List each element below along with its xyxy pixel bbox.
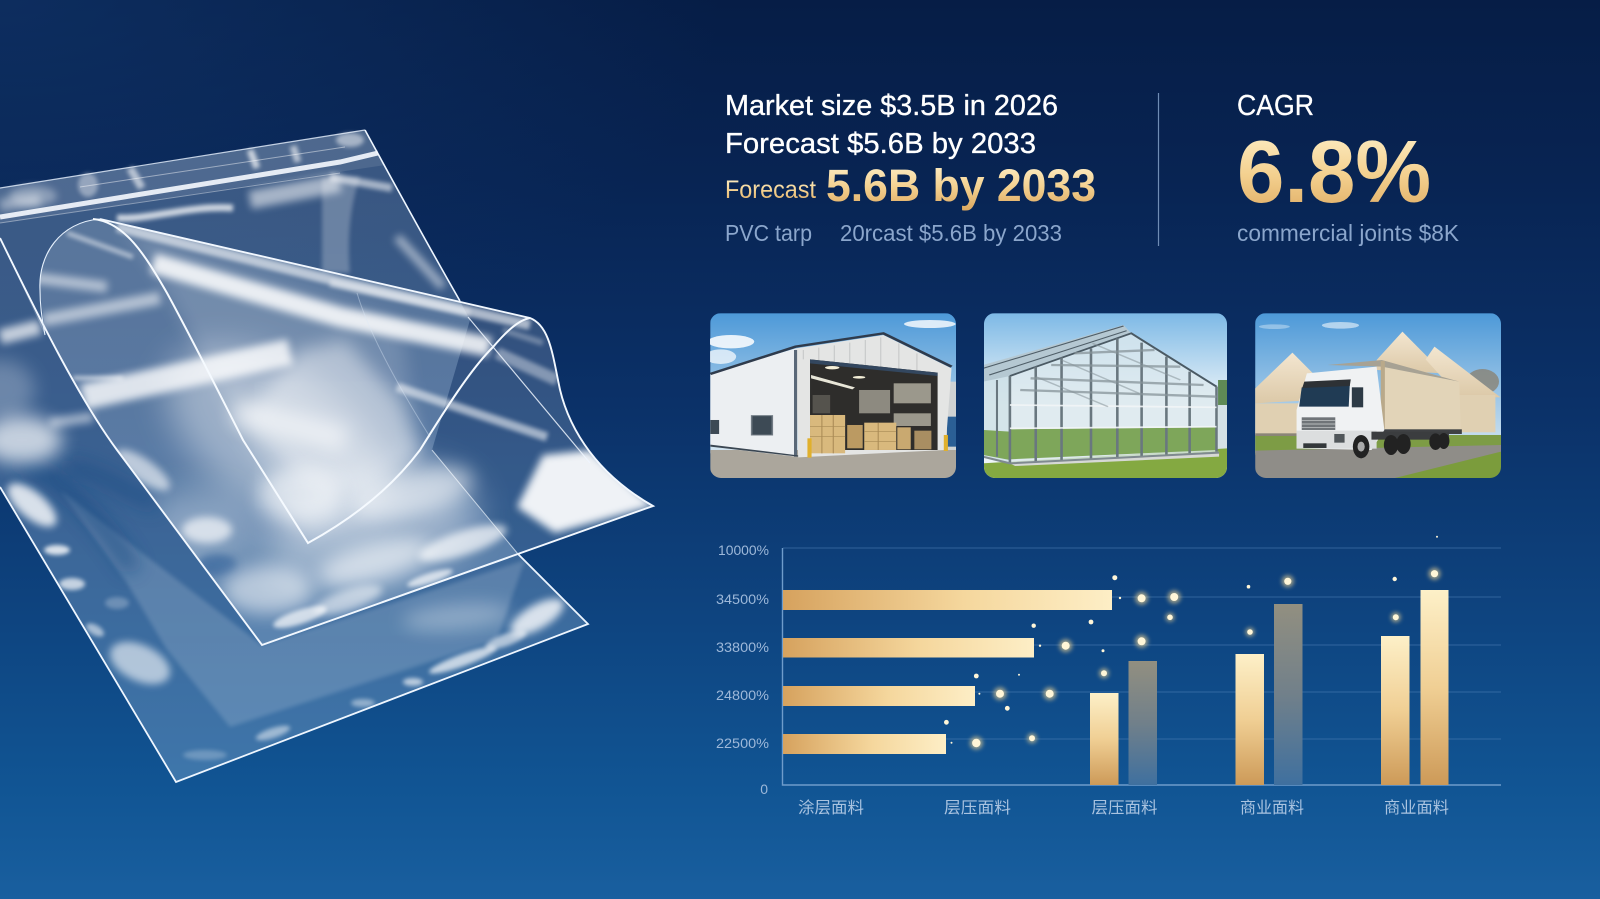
stats block — [725, 90, 1096, 246]
front curled sheet — [0, 219, 653, 645]
forecast gold label: Forecast — [725, 176, 816, 204]
y axis labels: 22500% — [716, 735, 769, 751]
photo: truck and tents — [1255, 313, 1501, 480]
x axis category labels: 层压面料 — [944, 799, 1011, 817]
glowing dots — [944, 536, 1440, 750]
divider — [1158, 93, 1160, 246]
market size line: Market size $3.5B in 2026 — [725, 90, 1058, 122]
forecast note: 20rcast $5.6B by 2033 — [840, 220, 1062, 246]
x axis category labels: 商业面料 — [1240, 799, 1304, 817]
CAGR block — [1237, 90, 1460, 246]
x axis category labels — [798, 799, 1449, 817]
soft light wash over the flap — [131, 238, 422, 534]
y axis labels — [716, 542, 769, 797]
CAGR value: 6.8% — [1237, 122, 1431, 221]
y axis labels: 34500% — [716, 591, 769, 607]
product note: PVC tarp — [725, 220, 812, 246]
x axis category labels: 商业面料 — [1384, 799, 1449, 817]
commercial note: commercial joints $8K — [1237, 220, 1460, 246]
photo: greenhouse — [983, 313, 1228, 480]
horizontal bars — [783, 590, 1112, 754]
x axis category labels: 层压面料 — [1092, 799, 1158, 817]
y axis labels: 24800% — [716, 687, 769, 703]
photo: warehouse — [705, 313, 956, 480]
curled flap edges — [0, 219, 653, 645]
forecast gold value: 5.6B by 2033 — [826, 160, 1096, 211]
y axis labels: 0 — [760, 781, 768, 797]
x axis category labels: 涂层面料 — [798, 799, 864, 817]
y axis labels: 10000% — [718, 542, 769, 558]
CAGR label: CAGR — [1237, 90, 1314, 122]
y axis labels: 33800% — [716, 639, 769, 655]
zipper seal strip — [0, 130, 385, 223]
back sheet — [0, 130, 588, 782]
grid lines and axes — [782, 548, 1501, 785]
illustration: transparent PVC tarp sheets — [0, 130, 653, 782]
vertical bars — [1090, 590, 1448, 785]
chart: market values by fabric — [716, 536, 1501, 817]
forecast line: Forecast $5.6B by 2033 — [725, 128, 1036, 160]
